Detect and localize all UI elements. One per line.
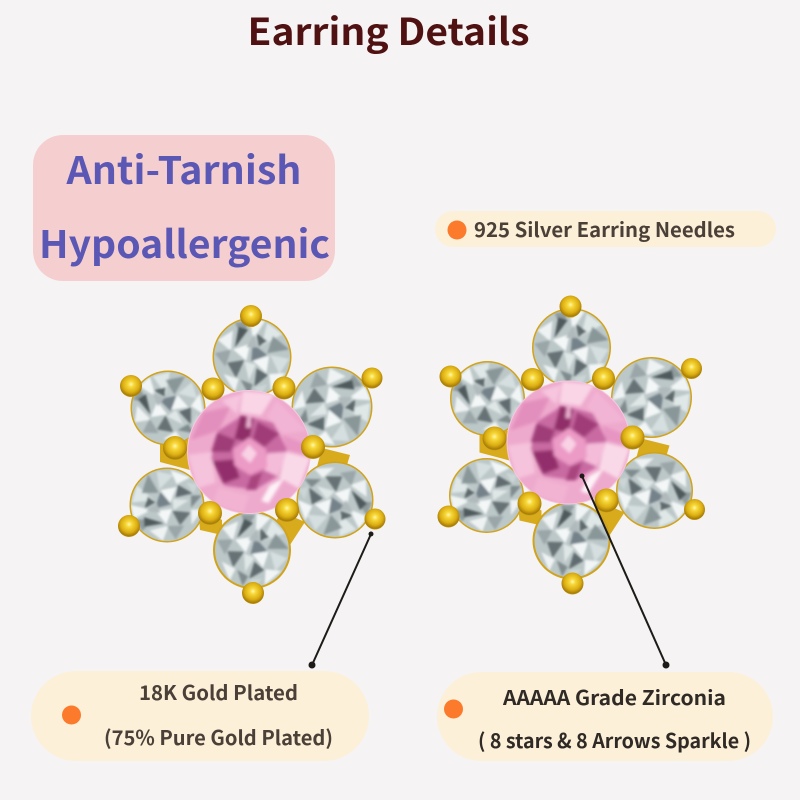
badge text: Hypoallergenic: Hypoallergenic xyxy=(39,214,330,269)
callout: AAAAA grade zirconia xyxy=(437,672,773,761)
title: Earring Details xyxy=(248,2,530,56)
callout text: 18K gold plated: 18K Gold Plated xyxy=(139,677,298,706)
callout text: needles: 925 Silver Earring Needles xyxy=(474,214,735,243)
earring: right flower stud xyxy=(437,296,705,594)
icon: orange bullet xyxy=(62,706,81,724)
panel: anti-tarnish and hypoallergenic badge xyxy=(33,135,335,281)
callout text: 75 percent pure gold: (75% Pure Gold Plated) xyxy=(104,722,333,751)
icon: orange bullet xyxy=(444,700,463,718)
callout text: AAAAA grade zirconia: AAAAA Grade Zirconia xyxy=(502,682,726,711)
callout text: 8 stars and 8 arrows sparkle: ( 8 stars & 8 Arrows Sparkle ) xyxy=(478,725,751,754)
callout: 18K gold plated xyxy=(31,671,369,761)
icon: orange bullet xyxy=(448,220,466,240)
callout: 925 silver earring needles xyxy=(435,211,776,247)
arrow: leader line to gold prong xyxy=(308,532,374,668)
badge text: Anti-Tarnish: Anti-Tarnish xyxy=(65,140,301,195)
arrow: leader line to pink zirconia xyxy=(580,474,670,668)
earring: left flower stud xyxy=(117,305,386,604)
